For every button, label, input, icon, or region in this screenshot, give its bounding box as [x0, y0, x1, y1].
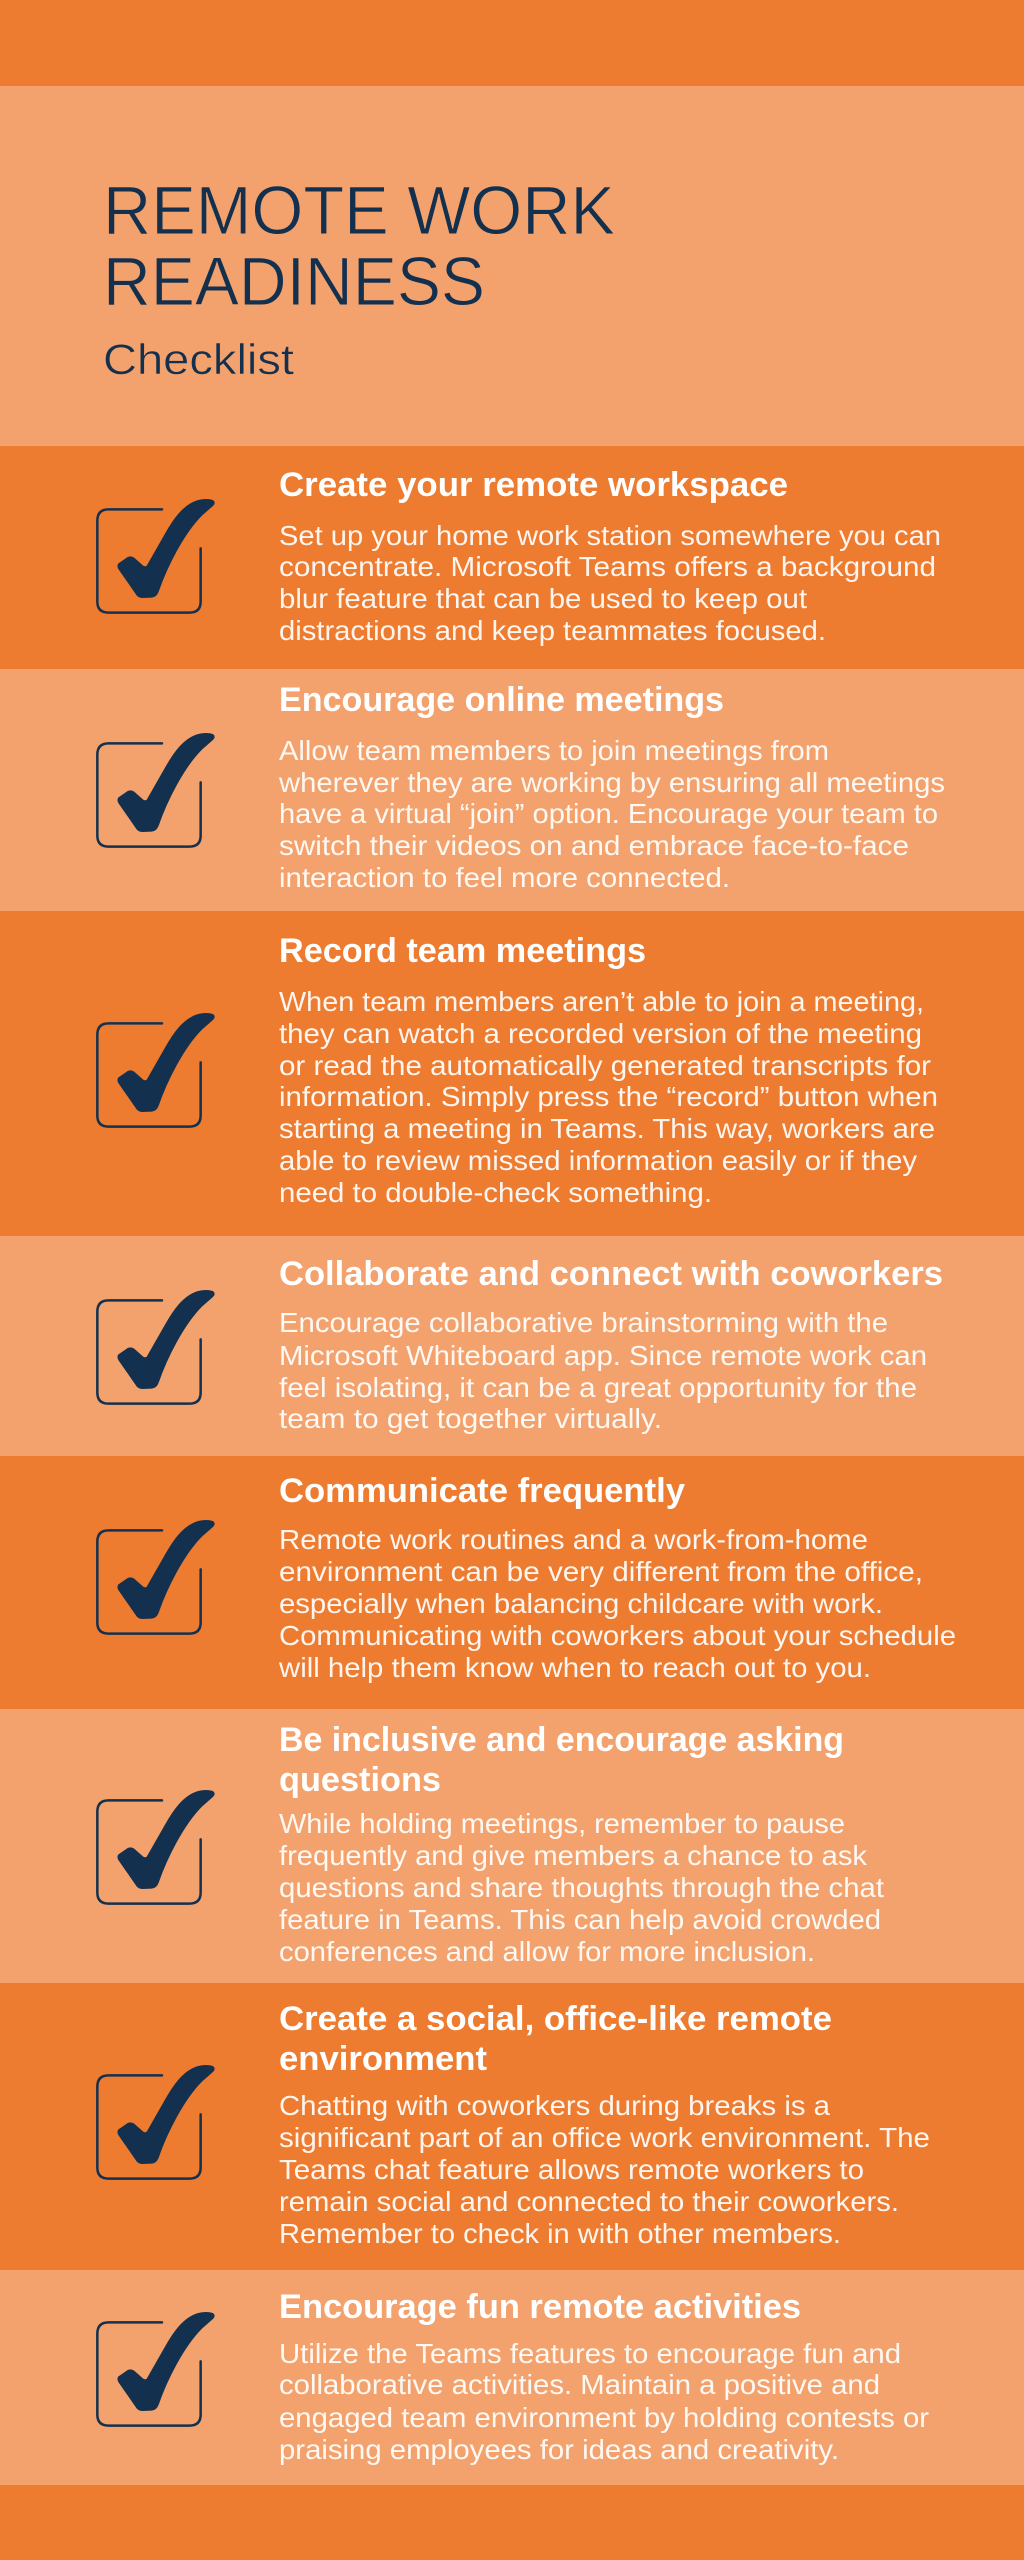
- bottom band: [0, 2485, 1024, 2560]
- text block: team to get together virtually.: [279, 1403, 662, 1434]
- text block: praising employees for ideas and creativity.: [279, 2434, 839, 2465]
- heading: [279, 2000, 832, 2078]
- text block: need to double-check something.: [279, 1177, 712, 1208]
- icon: checkbox: [97, 1291, 214, 1404]
- icon: checkbox: [97, 1791, 214, 1904]
- text block: distractions and keep teammates focused.: [279, 615, 826, 646]
- text block: blur feature that can be used to keep out: [279, 583, 807, 614]
- text block: environment can be very different from the office,: [279, 1556, 923, 1587]
- text block: or read the automatically generated transcripts for: [279, 1050, 931, 1081]
- text block: switch their videos on and embrace face-to-face: [279, 830, 909, 861]
- text block: interaction to feel more connected.: [279, 862, 730, 893]
- icon: checkbox: [97, 500, 214, 613]
- text block: Encourage collaborative brainstorming with the: [279, 1307, 888, 1338]
- text block: they can watch a recorded version of the meeting: [279, 1018, 922, 1049]
- heading: questions: [279, 1761, 441, 1799]
- text block: [279, 1307, 927, 1434]
- text block: significant part of an office work environment. The: [279, 2122, 930, 2153]
- text block: [279, 520, 941, 646]
- heading: Collaborate and connect with coworkers: [279, 1255, 943, 1293]
- text block: will help them know when to reach out to you.: [278, 1652, 871, 1683]
- panel: encourage online meetings: [0, 669, 1024, 911]
- text block: [279, 1808, 884, 1967]
- panel: be inclusive: [0, 1709, 1024, 1983]
- heading: Be inclusive and encourage asking: [279, 1721, 844, 1759]
- panel: header: [0, 86, 1024, 446]
- title: READINESS: [103, 243, 485, 320]
- text block: especially when balancing childcare with work.: [279, 1588, 883, 1619]
- text block: feature in Teams. This can help avoid crowded: [279, 1904, 881, 1935]
- icon: checkbox: [97, 2066, 214, 2179]
- text block: While holding meetings, remember to pause: [279, 1808, 845, 1839]
- icon: checkbox: [97, 1521, 214, 1634]
- text block: Utilize the Teams features to encourage fun and: [279, 2338, 901, 2369]
- text block: have a virtual “join” option. Encourage your team to: [279, 798, 938, 829]
- title: [103, 172, 615, 320]
- text block: Chatting with coworkers during breaks is a: [279, 2090, 830, 2121]
- heading: Create a social, office-like remote: [279, 2000, 832, 2038]
- text block: engaged team environment by holding contests or: [279, 2402, 929, 2433]
- panel: collaborate and connect: [0, 1236, 1024, 1456]
- subtitle: Checklist: [103, 336, 294, 384]
- text block: Teams chat feature allows remote workers to: [279, 2154, 864, 2185]
- text block: concentrate. Microsoft Teams offers a background: [279, 551, 936, 582]
- icon: checkbox: [97, 1014, 214, 1127]
- heading: environment: [279, 2040, 487, 2078]
- heading: Record team meetings: [279, 932, 646, 970]
- top band: [0, 0, 1024, 86]
- text block: Set up your home work station somewhere you can: [279, 520, 941, 551]
- text block: Communicating with coworkers about your schedule: [279, 1620, 956, 1651]
- text block: Remote work routines and a work-from-home: [279, 1524, 868, 1555]
- heading: Encourage online meetings: [279, 681, 724, 719]
- text block: wherever they are working by ensuring all meetings: [278, 767, 945, 798]
- text block: feel isolating, it can be a great opportunity for the: [279, 1372, 917, 1403]
- title: REMOTE WORK: [103, 172, 615, 249]
- text block: [278, 735, 945, 893]
- text block: [279, 2090, 930, 2249]
- text block: collaborative activities. Maintain a positive and: [279, 2369, 880, 2400]
- heading: Communicate frequently: [279, 1472, 685, 1510]
- text block: frequently and give members a chance to ask: [279, 1840, 868, 1871]
- text block: able to review missed information easily or if they: [279, 1145, 917, 1176]
- heading: Encourage fun remote activities: [279, 2288, 801, 2326]
- text block: [279, 986, 938, 1208]
- panel: create your remote workspace: [0, 446, 1024, 669]
- text block: remain social and connected to their coworkers.: [279, 2186, 899, 2217]
- text block: conferences and allow for more inclusion.: [279, 1936, 815, 1967]
- icon: checkbox: [97, 734, 214, 847]
- text block: Remember to check in with other members.: [279, 2218, 841, 2249]
- text block: [278, 1524, 956, 1683]
- text block: Allow team members to join meetings from: [279, 735, 829, 766]
- text block: information. Simply press the “record” button when: [279, 1081, 938, 1112]
- text block: starting a meeting in Teams. This way, workers are: [279, 1113, 935, 1144]
- heading: Create your remote workspace: [279, 466, 788, 504]
- text block: When team members aren’t able to join a meeting,: [279, 986, 924, 1017]
- panel: record team meetings: [0, 911, 1024, 1236]
- panel: fun remote activities: [0, 2270, 1024, 2485]
- text block: [279, 2338, 929, 2465]
- text block: questions and share thoughts through the chat: [279, 1872, 884, 1903]
- heading: [279, 1721, 844, 1799]
- icon: checkbox: [97, 2313, 214, 2426]
- panel: communicate frequently: [0, 1456, 1024, 1709]
- text block: Microsoft Whiteboard app. Since remote work can: [279, 1340, 927, 1371]
- panel: social environment: [0, 1983, 1024, 2270]
